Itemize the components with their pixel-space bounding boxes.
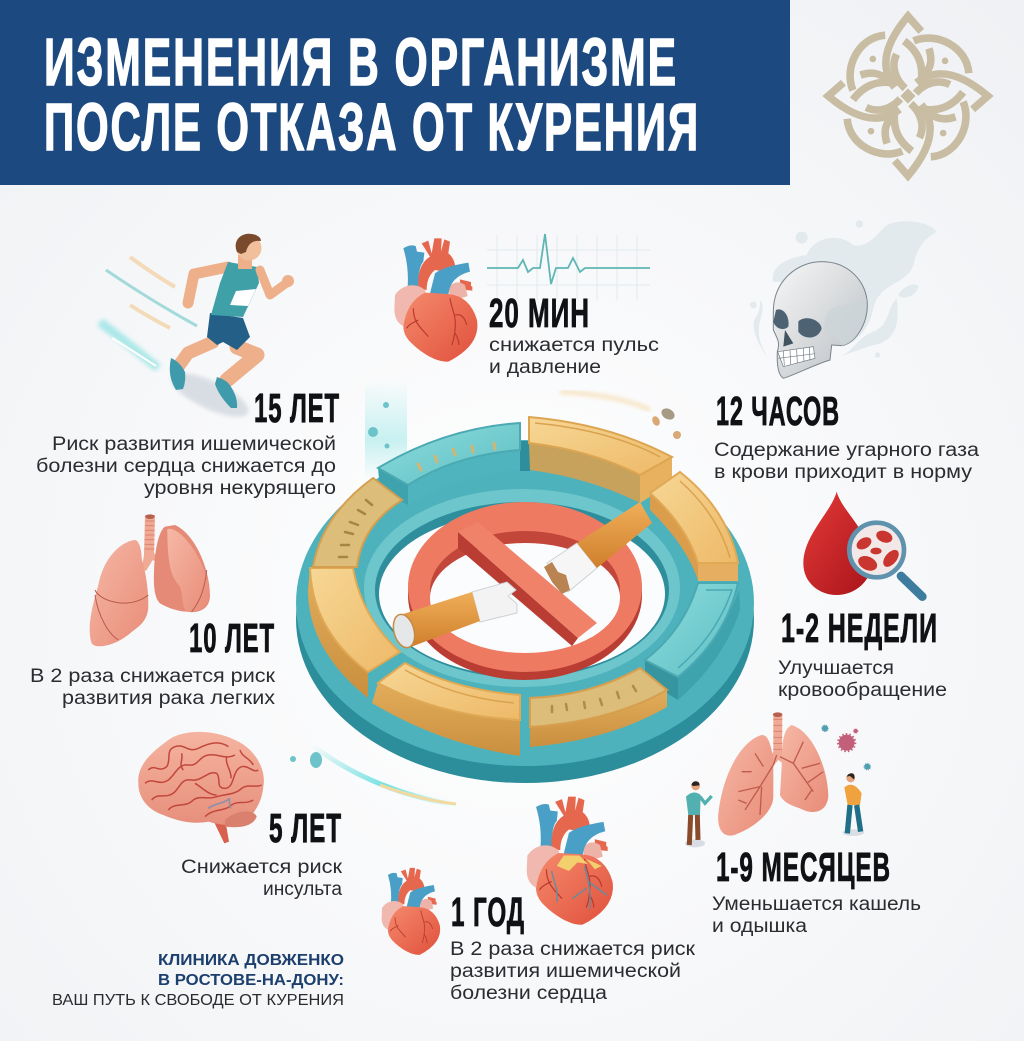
- segment teal right: [645, 583, 740, 700]
- icon: brain: [138, 732, 264, 843]
- label: 15 лет: Риск развития ишемической: [52, 434, 336, 455]
- icon: skull with smoke: [750, 220, 937, 378]
- label: 1 год: болезни сердца: [450, 983, 607, 1004]
- label: 5 лет: 5 ЛЕТ: [269, 805, 342, 851]
- icon: large heart: [527, 797, 613, 925]
- footer note: В РОСТОВЕ-НА-ДОНУ:: [158, 972, 344, 989]
- icon: runner: [100, 234, 294, 425]
- label: 1-2 недели: Улучшается: [778, 658, 894, 679]
- ring base: [296, 440, 754, 783]
- cigarette left: [390, 582, 517, 650]
- icon: heart top: [394, 238, 477, 362]
- title: ИЗМЕНЕНИЯ В ОРГАНИЗМЕ: [44, 25, 678, 100]
- footer note: ВАШ ПУТЬ К СВОБОДЕ ОТ КУРЕНИЯ: [52, 992, 344, 1009]
- central ring: [296, 417, 754, 783]
- person left: [685, 781, 712, 847]
- decorative glows around the ring: [365, 380, 681, 480]
- segment gold bottom left: [372, 663, 520, 756]
- label: 15 лет: уровня некурящего: [144, 478, 336, 499]
- label: 1 год: 1 ГОД: [451, 889, 525, 935]
- icon: blood drop with magnifier: [803, 492, 922, 597]
- label: 1 год: В 2 раза снижается риск: [450, 939, 696, 960]
- person right: [843, 773, 864, 836]
- segment gold bottom right: [530, 668, 667, 747]
- icon: ecg line: [487, 234, 650, 300]
- header banner: [0, 0, 790, 185]
- label: 20 мин: [489, 290, 659, 378]
- label: 20 мин: и давление: [489, 357, 601, 378]
- lungs: [718, 712, 828, 836]
- label: 5 лет: Снижается риск: [181, 857, 343, 878]
- cigarette right: [544, 502, 652, 594]
- label: 10 лет: В 2 раза снижается риск: [30, 666, 276, 687]
- label: 10 лет: 10 ЛЕТ: [189, 615, 275, 661]
- label: 5 лет: инсульта: [263, 879, 342, 900]
- label: 15 лет: [36, 385, 340, 499]
- label: 1-9 месяцев: Уменьшается кашель: [712, 894, 921, 915]
- label: 12 часов: [714, 388, 979, 483]
- label: 1 год: [450, 889, 696, 1004]
- label: 12 часов: Содержание угарного газа: [714, 440, 979, 461]
- segment gold left: [308, 568, 400, 698]
- logo: [828, 16, 988, 176]
- label: 12 часов: в крови приходит в норму: [714, 462, 973, 483]
- label: 1-9 месяцев: 1-9 МЕСЯЦЕВ: [716, 844, 891, 890]
- smoke: [750, 220, 937, 358]
- segment gold upper left: [313, 478, 402, 567]
- label: 20 мин: 20 МИН: [489, 290, 590, 336]
- label: 10 лет: [30, 615, 276, 709]
- label: 15 лет: 15 ЛЕТ: [254, 385, 340, 431]
- label: 1-9 месяцев: [712, 844, 921, 937]
- label: 1-2 недели: кровообращение: [778, 680, 947, 701]
- icon: lungs left: [90, 514, 210, 646]
- segment gold right: [650, 472, 738, 581]
- label: 1-9 месяцев: и одышка: [712, 916, 807, 937]
- segment teal top left: [378, 423, 520, 505]
- decorative streak: [290, 745, 456, 805]
- label: 20 мин: снижается пульс: [489, 335, 659, 356]
- label: 5 лет: [181, 805, 343, 900]
- inner ring: [364, 489, 680, 687]
- label: 1-2 недели: [778, 605, 947, 701]
- virus: [822, 725, 870, 770]
- prohibition sign: [408, 502, 642, 680]
- title: [44, 25, 700, 165]
- icon: small heart: [382, 868, 440, 955]
- label: 1 год: развития ишемической: [450, 961, 681, 982]
- label: 12 часов: 12 ЧАСОВ: [716, 388, 840, 434]
- segment gold top right: [529, 417, 672, 503]
- footer note: КЛИНИКА ДОВЖЕНКО: [158, 952, 344, 969]
- label: 15 лет: болезни сердца снижается до: [36, 456, 336, 477]
- label: 10 лет: развития рака легких: [62, 688, 276, 709]
- footer note: [52, 952, 344, 1009]
- icon: lungs with people and virus: [685, 712, 870, 847]
